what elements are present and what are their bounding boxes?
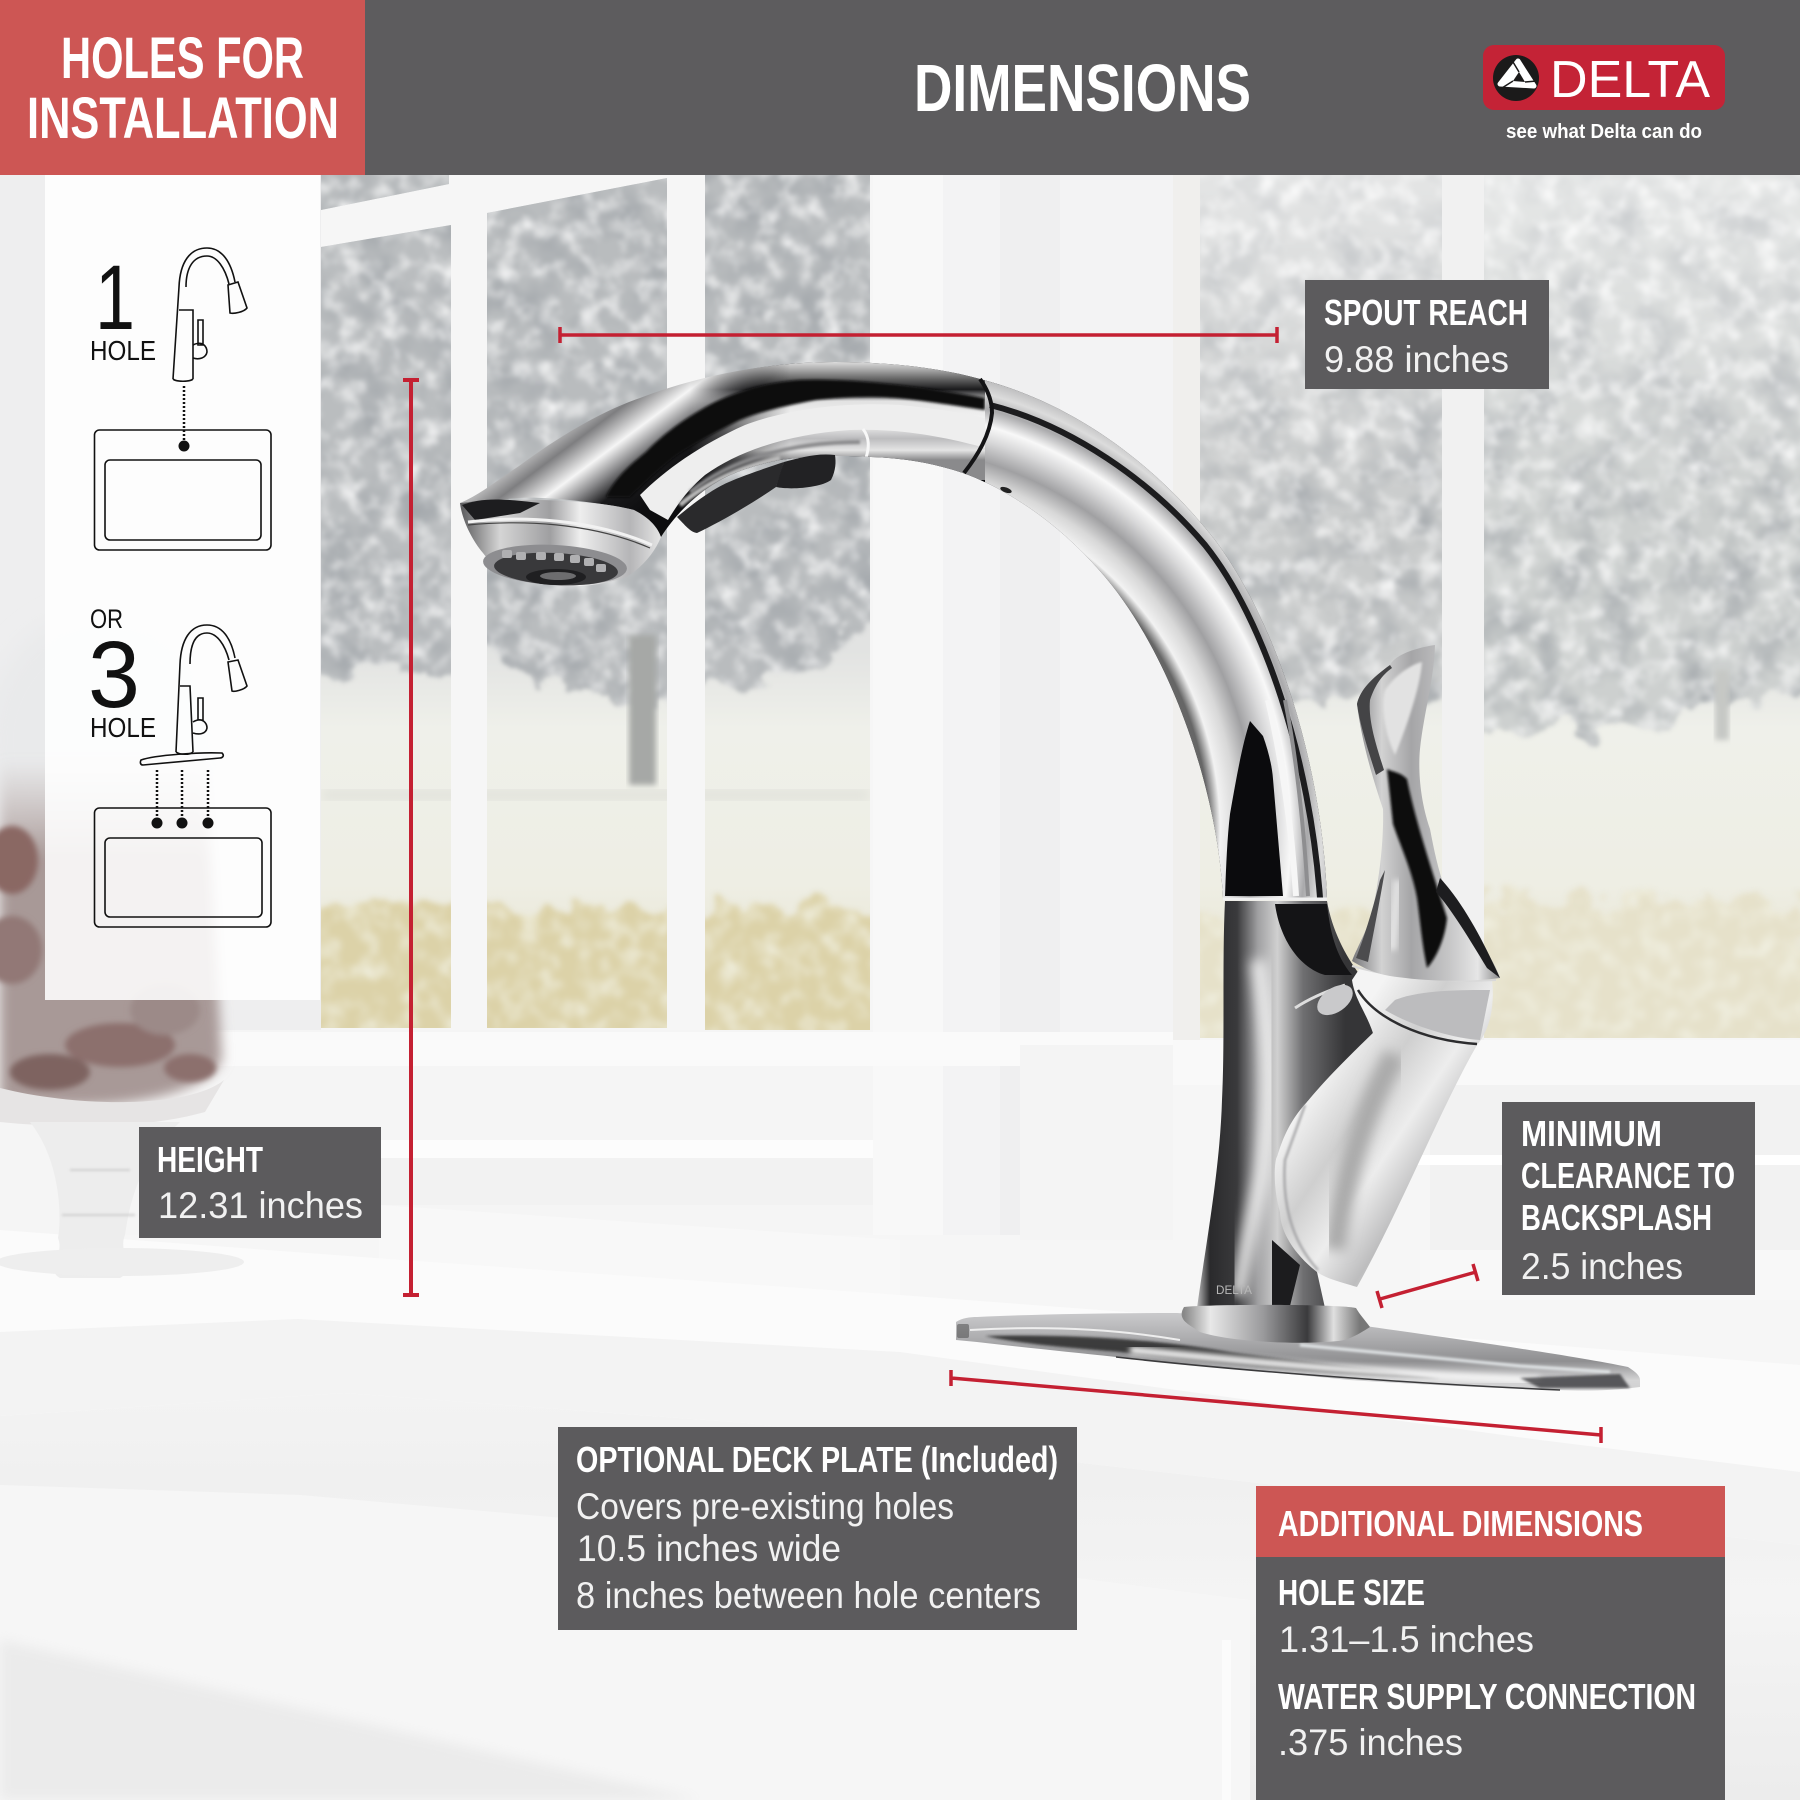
panel: additional dimensions: WATER SUPPLY CONNECTION [1278,1676,1696,1717]
spray trigger [677,455,836,533]
collar [1223,898,1327,900]
icon: three hole faucet with deck plate and sink: 3 [88,622,140,728]
callout: minimum clearance: MINIMUM [1521,1113,1662,1154]
section label: holes for installation: INSTALLATION [27,86,339,151]
icon: three hole faucet with deck plate and sink: HOLE [90,712,156,743]
title: DIMENSIONS [914,51,1251,126]
pull-down spout [460,350,1340,900]
callout: optional deck plate [558,1427,1077,1630]
dimension line: backsplash clearance [1377,1264,1478,1308]
callout: optional deck plate: OPTIONAL DECK PLATE (Included) [576,1439,1058,1480]
base ring [1182,1305,1370,1343]
section label: holes for installation [0,0,365,175]
handle lever [1352,645,1500,981]
callout: optional deck plate: 8 inches between hole centers [576,1575,1041,1616]
callout: spout reach: 9.88 inches [1324,339,1509,380]
icon: one hole faucet and sink: HOLE [90,335,156,366]
handle pod [1275,968,1493,1287]
icon: one hole faucet and sink [90,247,271,550]
dimension line: deck plate [951,1370,1601,1443]
panel heading [1256,1486,1725,1557]
callout: minimum clearance: BACKSPLASH [1521,1197,1712,1238]
deck plate [956,1313,1640,1391]
callout: optional deck plate: 10.5 inches wide [577,1528,841,1569]
panel: additional dimensions: .375 inches [1278,1722,1463,1763]
callout: height: HEIGHT [157,1139,263,1180]
Delta logo: DELTA [1550,51,1710,109]
callout: height: 12.31 inches [158,1185,363,1226]
dimension line: spout reach [560,327,1277,343]
panel: hole options [45,175,320,1000]
spray nozzle [460,499,661,589]
header bar [0,0,1800,175]
icon: three hole faucet with deck plate and sink [88,604,271,927]
faucet body [1197,901,1373,1308]
callout: minimum clearance: CLEARANCE TO [1521,1155,1735,1196]
callout: spout reach [1305,280,1549,389]
panel: additional dimensions [1256,1486,1725,1800]
icon: one hole faucet and sink: 1 [95,247,135,349]
glass jar and cherries [0,610,244,1278]
section label: holes for installation: HOLES FOR [61,26,304,91]
faucet body: DELTA [1216,1283,1252,1297]
panel: additional dimensions: 1.31–1.5 inches [1279,1619,1534,1660]
sill steps [0,1030,873,1235]
callout: height [139,1127,381,1238]
panel: additional dimensions: HOLE SIZE [1278,1572,1425,1613]
dimension line: height [403,380,419,1295]
callout: optional deck plate: Covers pre-existing holes [576,1486,954,1527]
callout: minimum clearance [1502,1102,1755,1295]
Delta logo [1483,45,1725,143]
Delta logo: see what Delta can do [1506,121,1702,143]
callout: spout reach: SPOUT REACH [1324,292,1528,333]
panel heading: ADDITIONAL DIMENSIONS [1278,1503,1643,1544]
faucet [460,350,1640,1391]
icon: three hole faucet with deck plate and sink: OR [90,604,123,634]
callout: minimum clearance: 2.5 inches [1521,1246,1683,1287]
counter [0,1230,1800,1800]
